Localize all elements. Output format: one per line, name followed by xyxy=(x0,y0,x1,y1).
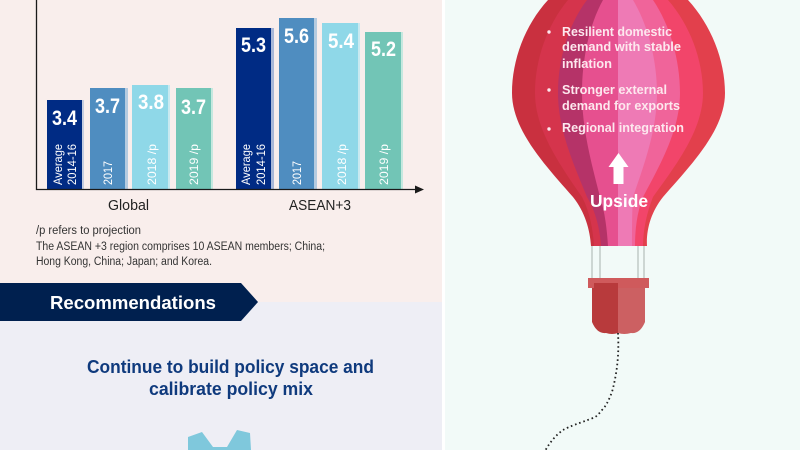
recommendations ribbon: Recommendations xyxy=(50,292,216,313)
category labels on bars: 2018 /p xyxy=(335,144,349,185)
basket xyxy=(588,278,649,334)
footnote: /p refers to projection xyxy=(36,225,141,237)
value labels: 3.7 xyxy=(181,96,206,119)
balloon text list xyxy=(547,25,684,135)
group labels: ASEAN+3 xyxy=(289,198,351,214)
recommendation heading xyxy=(87,356,374,399)
balloon text list: Regional integration xyxy=(562,121,684,135)
category labels on bars: Average xyxy=(51,144,65,185)
category labels on bars: 2017 xyxy=(290,161,304,185)
category labels on bars: 2018 /p xyxy=(145,144,159,185)
group labels: Global xyxy=(108,198,149,214)
icon: gear xyxy=(188,430,251,450)
bars: ASEAN+3 xyxy=(236,18,403,189)
value labels xyxy=(52,25,396,130)
value labels: 5.6 xyxy=(284,25,309,48)
icon: up arrow xyxy=(608,153,628,184)
balloon text list: demand for exports xyxy=(562,99,680,113)
footnote: The ASEAN +3 region comprises 10 ASEAN members; China; xyxy=(36,241,325,253)
category labels on bars: 2019 /p xyxy=(187,144,201,185)
value labels: 3.8 xyxy=(138,91,164,114)
bars: global xyxy=(47,85,213,189)
category labels on bars: 2019 /p xyxy=(377,144,391,185)
dotted flight path xyxy=(545,333,618,450)
value labels: 5.4 xyxy=(328,30,354,53)
ropes xyxy=(592,246,644,278)
category labels on bars: Average xyxy=(239,144,253,185)
panel: balloon background xyxy=(445,0,800,450)
bar chart xyxy=(36,0,424,214)
group labels xyxy=(108,198,351,214)
panel: chart background xyxy=(0,0,442,302)
recommendation heading: Continue to build policy space and xyxy=(87,356,374,377)
balloon envelope xyxy=(512,0,725,246)
panel: recommendations background xyxy=(0,302,442,450)
recommendations ribbon xyxy=(0,283,258,321)
icon: hot air balloon xyxy=(512,0,725,334)
value labels: 3.4 xyxy=(52,107,77,130)
value labels: 3.7 xyxy=(95,95,120,118)
upside label: Upside xyxy=(590,191,648,211)
value labels: 5.2 xyxy=(371,38,396,61)
balloon text list: inflation xyxy=(562,57,612,71)
balloon text list: demand with stable xyxy=(562,40,681,54)
value labels: 5.3 xyxy=(241,34,266,57)
axes xyxy=(36,0,424,194)
balloon text list: Resilient domestic xyxy=(562,25,672,39)
footnote: Hong Kong, China; Japan; and Korea. xyxy=(36,256,212,268)
category labels on bars: 2017 xyxy=(101,161,115,185)
category labels on bars xyxy=(51,144,391,185)
category labels on bars: 2014-16 xyxy=(65,144,79,185)
recommendation heading: calibrate policy mix xyxy=(149,378,314,399)
balloon text list: Stronger external xyxy=(562,83,667,97)
footnote xyxy=(36,225,325,268)
category labels on bars: 2014-16 xyxy=(254,144,268,185)
